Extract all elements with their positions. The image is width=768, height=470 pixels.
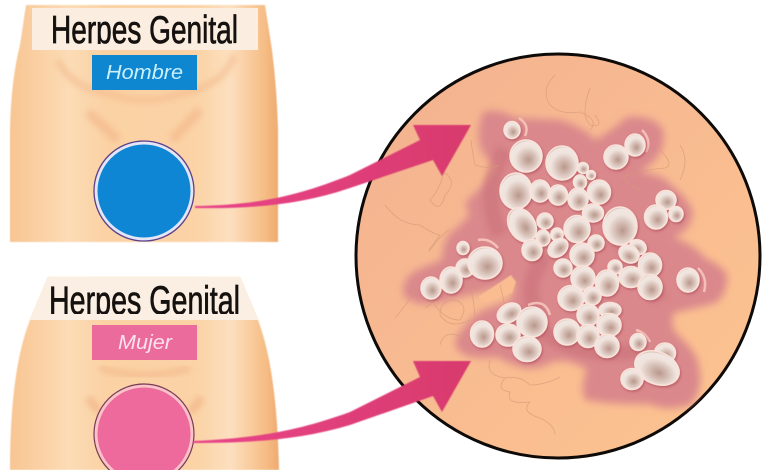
peach gap xyxy=(480,275,516,297)
rash area xyxy=(403,111,727,408)
blisters xyxy=(421,122,699,391)
waist band xyxy=(30,277,258,320)
waist band xyxy=(32,8,258,50)
label: Mujer: Mujer xyxy=(118,332,173,354)
circle: pink zone xyxy=(94,384,194,470)
torso: female xyxy=(10,277,279,470)
circle: blue zone xyxy=(94,141,194,241)
torso: male xyxy=(10,5,278,242)
groin creases xyxy=(58,55,234,100)
label: Hombre xyxy=(92,55,197,90)
blister halos xyxy=(478,118,705,342)
panel: Hombre anatomy xyxy=(10,5,278,242)
hairs xyxy=(385,75,685,435)
darker rash shading xyxy=(491,150,660,352)
arrow: Mujer to skin detail xyxy=(193,361,471,443)
panel: Mujer anatomy xyxy=(10,277,279,470)
groin creases xyxy=(100,368,190,375)
arrow: Hombre to skin detail xyxy=(195,125,471,208)
label: Mujer xyxy=(92,325,197,360)
label: Hombre: Hombre xyxy=(106,62,183,84)
heading: Herpes Genital (Hombre): Herpes Genital xyxy=(51,9,238,52)
heading: Herpes Genital (Mujer): Herpes Genital xyxy=(49,279,240,323)
magnified skin circle xyxy=(356,54,760,458)
